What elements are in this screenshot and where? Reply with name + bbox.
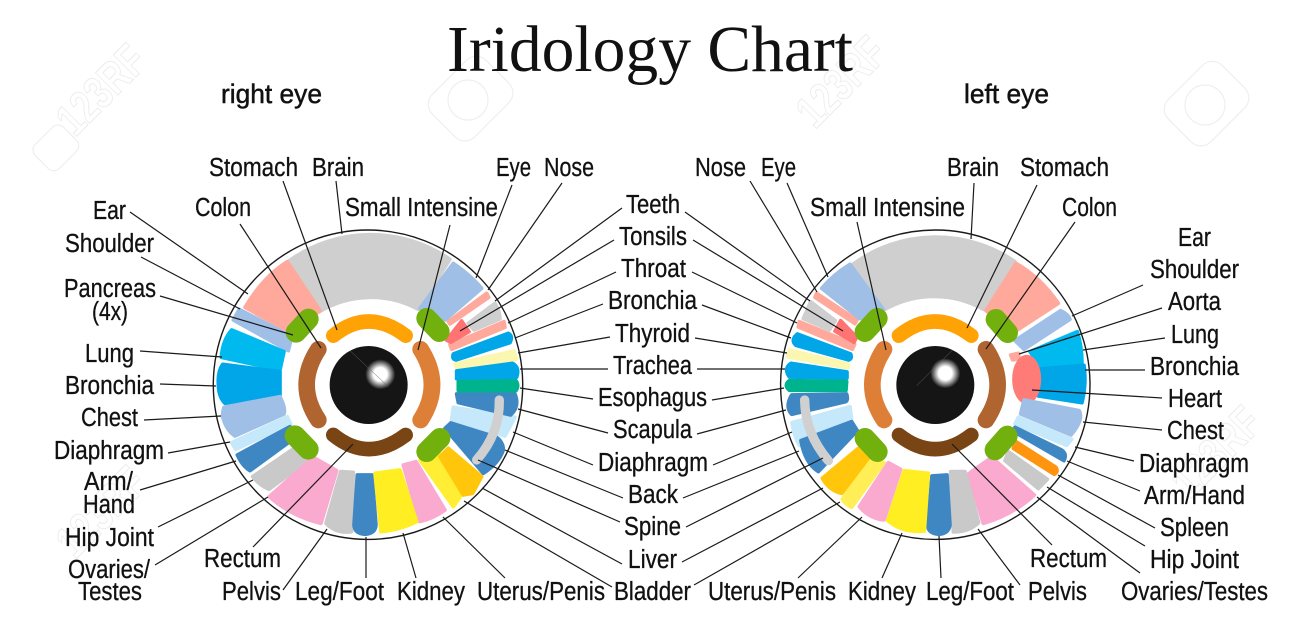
- zone: uterus: [859, 463, 901, 520]
- outline circle: [213, 230, 523, 539]
- label: Diaphragm: [513, 432, 792, 477]
- zone: arm and hand: [1015, 427, 1065, 461]
- label: Arm/Hand: [1067, 461, 1245, 510]
- label: Spine: [478, 458, 823, 541]
- label: Leg/Foot: Leg/Foot: [295, 578, 384, 606]
- label: Small Intensine: Small Intensine: [345, 194, 498, 222]
- zone: scapula: [457, 394, 517, 415]
- zone: esophagus: [786, 381, 847, 390]
- stomach pointer in pupil: [350, 351, 388, 387]
- zone: nose and eye: [822, 264, 883, 319]
- zone: brain: [289, 235, 450, 312]
- zone: tonsils gray: [468, 303, 500, 330]
- label: Ovaries/Testes: [68, 497, 268, 606]
- label: Chest: Chest: [81, 404, 138, 432]
- zone: liver: [440, 448, 482, 495]
- label: Heart: Heart: [1168, 385, 1222, 413]
- zone: spleen: [1013, 442, 1057, 474]
- label: Liver: Liver: [628, 546, 677, 574]
- labels: right eye, bottom: [204, 444, 840, 606]
- watermark: top row: 123RF: [45, 456, 156, 567]
- label: Eye: [761, 154, 828, 277]
- zone: bronchia: [218, 364, 280, 403]
- zone: tonsils: [835, 321, 857, 342]
- zone: thyroid: [787, 350, 849, 368]
- label: Esophagus: Esophagus: [598, 384, 707, 412]
- label: Colon: Colon: [1062, 194, 1117, 222]
- pancreas blobs: [295, 318, 440, 452]
- label: Teeth: Teeth: [626, 191, 680, 219]
- label: Chest: [81, 404, 221, 432]
- title: Iridology Chart: [447, 13, 853, 86]
- label: Colon: Colon: [195, 194, 251, 222]
- label: Bronchia: [515, 287, 791, 338]
- label: Spleen: Spleen: [1160, 514, 1229, 542]
- label: Ovaries/Testes: [1037, 497, 1268, 606]
- zone: teeth: [448, 293, 489, 324]
- labels: right eye, top and left: [54, 154, 594, 606]
- pupil: [330, 346, 408, 424]
- zone: brain: [853, 237, 1015, 309]
- label: Diaphragm: Diaphragm: [1139, 450, 1249, 478]
- label: Pancreas (4x): Pancreas: [64, 275, 156, 303]
- label: Esophagus: [520, 384, 784, 412]
- zone: shoulder: [1015, 311, 1070, 349]
- pupil: [896, 346, 974, 424]
- label: Heart: [1032, 385, 1222, 413]
- label: Back: [505, 450, 799, 509]
- zone: chest: [1021, 400, 1081, 435]
- diagram: right eye: [213, 230, 523, 539]
- zone: tonsils: [447, 321, 469, 342]
- label: Chest: Chest: [1167, 417, 1224, 445]
- colon arc: [307, 349, 318, 420]
- pancreas blobs: [865, 318, 1008, 452]
- small intestine arc: [872, 349, 884, 420]
- label: Brain: Brain: [947, 154, 999, 182]
- label: Leg/Foot: [295, 537, 384, 606]
- label: Leg/Foot: [926, 536, 1014, 606]
- label: Teeth: [495, 191, 810, 301]
- label: Aorta: Aorta: [1168, 288, 1222, 316]
- heading: left eye: left eye: [964, 79, 1049, 109]
- label: Arm/Hand: Hand: [83, 491, 135, 519]
- label: Brain: [947, 154, 999, 239]
- zone: trachea: [457, 363, 518, 379]
- label: Uterus/Penis: [708, 517, 862, 606]
- label: Diaphragm: Diaphragm: [54, 437, 164, 465]
- label: Chest: [1083, 417, 1224, 445]
- label: Nose: Nose: [544, 154, 594, 182]
- label: Stomach: Stomach: [209, 154, 298, 182]
- label: Uterus/Penis: Uterus/Penis: [477, 578, 605, 606]
- zone: trachea: [787, 363, 847, 378]
- label: Pelvis: Pelvis: [1028, 578, 1087, 606]
- watermark: top row: 123RF: [45, 34, 156, 145]
- zone: scapula: [788, 394, 847, 414]
- zone: throat: [450, 322, 505, 349]
- zone: aorta: [1011, 353, 1019, 360]
- zone: nose and eye: [420, 263, 482, 320]
- label: Rectum: Rectum: [204, 545, 281, 573]
- zone: hip joint: [1005, 452, 1047, 489]
- stomach arc: [899, 321, 971, 336]
- labels: left eye, top and right: [695, 154, 1268, 606]
- label: Stomach: [209, 154, 337, 330]
- label: Shoulder: [1072, 256, 1239, 316]
- label: Pelvis: [978, 529, 1087, 606]
- label: Diaphragm: Diaphragm: [598, 449, 708, 477]
- zone: shoulder: [233, 309, 292, 351]
- watermark: top row: 123RF: [785, 26, 896, 137]
- label: Rectum: Rectum: [1030, 545, 1107, 573]
- zone: kidney: [888, 471, 928, 531]
- label: Bronchia: Bronchia: [65, 372, 155, 400]
- zone: back: [445, 422, 503, 473]
- label: Shoulder: Shoulder: [65, 230, 154, 258]
- zone: spine: [477, 400, 499, 460]
- label: Nose: [488, 154, 594, 290]
- zone: pelvis: [326, 472, 353, 532]
- label: Ovaries/Testes: Testes: [78, 578, 142, 606]
- label: Bronchia: Bronchia: [1150, 353, 1240, 381]
- label: Trachea: Trachea: [613, 352, 693, 380]
- label: Spleen: [1058, 475, 1229, 542]
- zone: esophagus: [458, 381, 518, 391]
- label: Pancreas (4x): (4x): [92, 298, 128, 326]
- label: Uterus/Penis: Uterus/Penis: [708, 578, 836, 606]
- zone: leg and foot: [928, 475, 950, 534]
- label: Eye: Eye: [761, 154, 796, 182]
- label: Lung: Lung: [85, 340, 134, 368]
- zone: lung: [1030, 332, 1082, 367]
- zone: spine: [805, 400, 828, 461]
- labels: left eye, bottom: [708, 444, 1107, 606]
- label: Kidney: [848, 533, 916, 606]
- label: Bronchia: Bronchia: [608, 287, 698, 315]
- label: Hip Joint: Hip Joint: [65, 524, 154, 552]
- zone: diaphragm 2: [792, 407, 852, 445]
- zone: kidney: [375, 470, 417, 532]
- zone: leg and foot: [354, 475, 376, 534]
- zone: liver: [822, 448, 868, 493]
- label: Ovaries/Testes: Ovaries/Testes: [1121, 578, 1268, 606]
- label: Small Intensine: [345, 194, 498, 350]
- small intestine arc: [421, 349, 432, 420]
- stomach pointer in pupil: [917, 350, 953, 386]
- zone: back: [801, 422, 857, 472]
- label: Thyroid: [518, 320, 787, 353]
- label: Small Intensine: Small Intensine: [810, 194, 965, 222]
- zone: throat: [798, 322, 855, 349]
- pupil highlight: [930, 358, 960, 388]
- zone: heart: [1014, 357, 1039, 402]
- label: Back: Back: [628, 481, 678, 509]
- zone: ear: [245, 262, 320, 333]
- zone: bladder: [842, 460, 884, 507]
- label: Arm/Hand: [83, 461, 236, 519]
- outline circle: [781, 230, 1090, 539]
- label: Hip Joint: [1047, 487, 1239, 574]
- watermark: top row: 123RF: [1160, 396, 1271, 507]
- label: Lung: [1083, 321, 1219, 350]
- label: Shoulder: [65, 230, 240, 309]
- label: Bladder: [464, 501, 840, 606]
- zone: thyroid: [455, 351, 517, 369]
- label: Bladder: Bladder: [614, 578, 691, 606]
- label: Small Intensine: [810, 194, 965, 350]
- label: Brain: Brain: [312, 154, 364, 182]
- label: Ear: [93, 197, 248, 294]
- label: Nose: Nose: [695, 154, 746, 182]
- zone: tonsils gray: [803, 302, 835, 330]
- label: Scapula: [518, 409, 786, 444]
- label: Tonsils: [460, 223, 843, 331]
- pupil highlight: [365, 359, 395, 389]
- label: Lung: Lung: [1171, 321, 1219, 349]
- label: Tonsils: Tonsils: [619, 223, 687, 251]
- label: Colon: [986, 194, 1117, 349]
- zone: diaphragm: [232, 417, 291, 449]
- zone: diaphragm 2: [452, 407, 515, 436]
- zone: teeth: [815, 293, 857, 324]
- label: Diaphragm: [1075, 447, 1249, 478]
- label: Nose: [695, 154, 817, 292]
- colon arc: [986, 349, 998, 420]
- zone: chest: [223, 397, 284, 436]
- label: Hip Joint: [65, 480, 253, 552]
- label: Ovaries/Testes: Ovaries/: [68, 556, 151, 584]
- labels: centre column, shared by both eyes: [460, 191, 843, 574]
- zone: ovaries: [269, 457, 337, 523]
- label: Colon: [195, 194, 321, 348]
- zone: hip joint: [253, 447, 313, 489]
- zone: ovaries: [968, 457, 1034, 523]
- zone: diaphragm: [1015, 417, 1072, 445]
- label: Throat: [508, 255, 797, 323]
- label: Liver: [482, 488, 823, 574]
- label: Ear: Ear: [93, 197, 126, 225]
- label: Rectum: [204, 444, 353, 573]
- label: Hip Joint: Hip Joint: [1150, 546, 1239, 574]
- label: Eye: [476, 154, 531, 278]
- label: Kidney: Kidney: [848, 578, 916, 606]
- label: Stomach: [967, 154, 1109, 328]
- zone: stomach area salmon: [986, 263, 1058, 332]
- zone: arm and hand: [237, 427, 297, 471]
- label: Pancreas (4x): [64, 275, 293, 335]
- label: Pelvis: Pelvis: [222, 578, 281, 606]
- heading: right eye: right eye: [221, 79, 322, 109]
- rectum arc: [333, 435, 406, 449]
- label: Pelvis: [222, 529, 327, 606]
- zone: bronchia: [1038, 365, 1085, 403]
- label: Rectum: [952, 444, 1107, 573]
- zone: pelvis: [951, 472, 979, 532]
- label: Arm/Hand: Arm/Hand: [1144, 482, 1245, 510]
- label: Aorta: [1019, 288, 1222, 354]
- zone: bladder: [420, 452, 462, 507]
- stomach arc: [333, 321, 406, 336]
- label: Uterus/Penis: [443, 517, 605, 606]
- label: Eye: Eye: [496, 154, 531, 182]
- zone: uterus: [403, 462, 445, 522]
- label: Arm/Hand: Arm/: [84, 468, 134, 496]
- label: Shoulder: Shoulder: [1150, 256, 1239, 284]
- label: Kidney: [397, 533, 465, 606]
- zone: bronchia 2: [793, 334, 851, 360]
- label: Throat: Throat: [621, 255, 686, 283]
- rectum arc: [899, 435, 971, 449]
- zone: bronchia 2: [453, 333, 511, 360]
- label: Thyroid: Thyroid: [615, 320, 690, 348]
- label: Scapula: Scapula: [613, 416, 693, 444]
- label: Leg/Foot: Leg/Foot: [926, 578, 1014, 606]
- label: Kidney: Kidney: [397, 578, 465, 606]
- label: Ear: Ear: [1178, 224, 1211, 252]
- zone: lung: [221, 330, 284, 370]
- label: Lung: [85, 340, 222, 368]
- diagram: left eye: [781, 230, 1090, 539]
- label: Spine: Spine: [624, 513, 681, 541]
- label: Stomach: Stomach: [1020, 154, 1109, 182]
- label: Brain: [312, 154, 364, 234]
